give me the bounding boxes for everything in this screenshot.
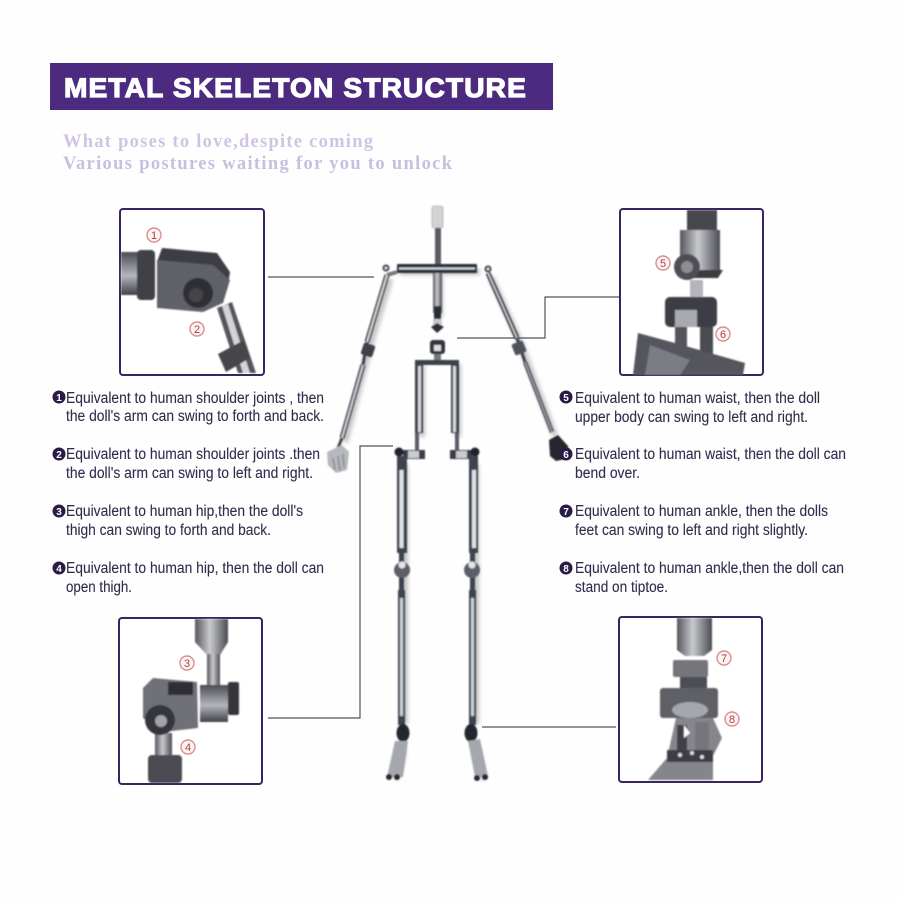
callout number 6: [716, 327, 730, 341]
connector: waist panel to skeleton: [457, 297, 620, 338]
text block: joint descriptions 5 to 8: [560, 390, 846, 596]
panel: shoulder joint detail: [120, 209, 264, 375]
callout number 4: [181, 740, 195, 754]
callout number 3: [180, 656, 194, 670]
text block: joint descriptions 1 to 4: open thigh.: [66, 579, 132, 596]
text block: joint descriptions 5 to 8: Equivalent to human waist, then the doll can: [575, 446, 846, 463]
text block: joint descriptions 1 to 4: Equivalent to human shoulder joints , then: [66, 390, 324, 407]
title banner: METAL SKELETON STRUCTURE: [64, 73, 527, 103]
text block: joint descriptions 5 to 8: feet can swing to left and right slightly.: [575, 522, 808, 539]
text block: joint descriptions 5 to 8: Equivalent to human ankle,then the doll can: [575, 560, 844, 577]
text block: joint descriptions 5 to 8: 8: [563, 564, 569, 575]
callout number 1: [147, 228, 161, 242]
callout number 8: [725, 712, 739, 726]
callout number 4: 4: [185, 742, 191, 754]
title banner: [50, 63, 553, 110]
callout number 6: 6: [720, 329, 726, 341]
text block: joint descriptions 1 to 4: 4: [56, 564, 62, 575]
text block: joint descriptions 1 to 4: Equivalent to human hip, then the doll can: [66, 560, 324, 577]
text block: joint descriptions 5 to 8: 5: [563, 393, 569, 404]
skeleton figure: [327, 206, 570, 781]
callout number 1: 1: [151, 230, 157, 242]
panel: waist joint detail: [620, 209, 763, 375]
panel: hip joint detail: [119, 618, 262, 784]
text block: joint descriptions 5 to 8: 6: [563, 450, 569, 461]
subtitle: Various postures waiting for you to unlock: [63, 154, 453, 174]
text block: joint descriptions 1 to 4: Equivalent to human hip,then the doll's: [66, 503, 303, 520]
text block: joint descriptions 1 to 4: 1: [56, 393, 62, 404]
subtitle: What poses to love,despite coming: [63, 132, 374, 152]
connector: shoulder panel to skeleton: [268, 276, 374, 278]
panel: ankle joint detail: [619, 617, 762, 782]
text block: joint descriptions 1 to 4: the doll's arm can swing to left and right.: [66, 465, 313, 482]
text block: joint descriptions 1 to 4: 2: [56, 450, 62, 461]
callout number 8: 8: [729, 714, 735, 726]
callout number 3: 3: [184, 658, 190, 670]
text block: joint descriptions 1 to 4: the doll's arm can swing to forth and back.: [66, 408, 324, 425]
callout number 7: 7: [721, 653, 727, 665]
text block: joint descriptions 1 to 4: thigh can swing to forth and back.: [66, 522, 271, 539]
text block: joint descriptions 5 to 8: upper body can swing to left and right.: [575, 409, 808, 426]
text block: joint descriptions 1 to 4: Equivalent to human shoulder joints .then: [66, 446, 320, 463]
text block: joint descriptions 5 to 8: stand on tiptoe.: [575, 579, 668, 596]
connector: ankle panel to skeleton: [482, 726, 616, 728]
callout number 7: [717, 651, 731, 665]
text block: joint descriptions 5 to 8: Equivalent to human ankle, then the dolls: [575, 503, 828, 520]
connector: hip panel to skeleton: [268, 446, 393, 718]
text block: joint descriptions 5 to 8: Equivalent to human waist, then the doll: [575, 390, 820, 407]
callout number 5: 5: [660, 258, 666, 270]
text block: joint descriptions 5 to 8: 7: [563, 507, 569, 518]
text block: joint descriptions 5 to 8: bend over.: [575, 465, 640, 482]
subtitle: [63, 132, 453, 174]
text block: joint descriptions 1 to 4: [52, 390, 324, 596]
callout number 2: 2: [194, 324, 200, 336]
text block: joint descriptions 1 to 4: 3: [56, 507, 62, 518]
callout number 5: [656, 256, 670, 270]
callout number 2: [190, 322, 204, 336]
